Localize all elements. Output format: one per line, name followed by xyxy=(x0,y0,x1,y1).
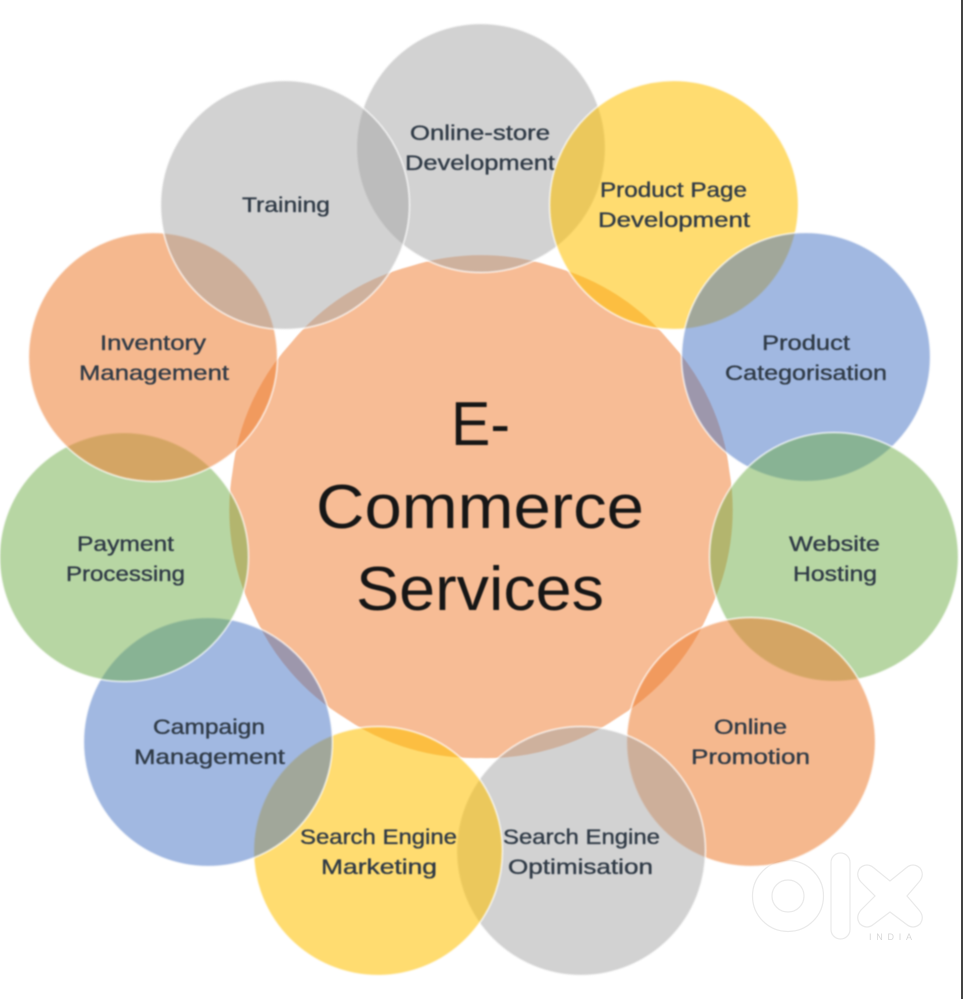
node: Training xyxy=(160,80,410,330)
watermark: OLX India logo xyxy=(752,853,922,942)
node: Payment Processing: Payment xyxy=(77,533,174,556)
node: Search Engine Optimisation xyxy=(456,726,706,976)
node: Online Promotion xyxy=(626,618,876,866)
node: Online-store Development xyxy=(356,24,606,272)
node: Search Engine Optimisation: Search Engine xyxy=(503,826,660,849)
node: Website Hosting xyxy=(710,432,958,682)
node: Product Page Development: Development xyxy=(598,209,750,232)
node: Product Page Development xyxy=(550,80,798,330)
node: Payment Processing: Processing xyxy=(66,563,185,586)
watermark: OLX India logo: INDIA xyxy=(869,932,912,942)
node: Inventory Management: Inventory xyxy=(100,332,207,355)
node: Product Categorisation: Product xyxy=(762,332,850,355)
node: Payment Processing xyxy=(0,432,248,682)
central hub: E-Commerce Services: Commerce xyxy=(316,473,644,542)
central hub: E-Commerce Services xyxy=(229,255,733,758)
node: Online-store Development: Development xyxy=(405,152,555,175)
node: Training: Training xyxy=(242,194,330,217)
node: Online Promotion: Online xyxy=(714,716,787,739)
node: Inventory Management xyxy=(28,232,278,482)
node: Campaign Management: Campaign xyxy=(153,716,265,739)
node: Search Engine Optimisation: Optimisation xyxy=(508,856,653,879)
node: Website Hosting: Website xyxy=(789,533,880,556)
central hub: E-Commerce Services: Services xyxy=(356,555,604,624)
node: Product Categorisation: Categorisation xyxy=(725,362,887,385)
node: Search Engine Marketing xyxy=(254,726,502,976)
node: Inventory Management: Management xyxy=(79,362,229,385)
node: Product Categorisation xyxy=(682,232,930,482)
node: Search Engine Marketing: Search Engine xyxy=(300,826,457,849)
node: Website Hosting: Hosting xyxy=(793,563,877,586)
node: Online-store Development: Online-store xyxy=(410,122,550,145)
node: Online Promotion: Promotion xyxy=(691,746,810,769)
node: Search Engine Marketing: Marketing xyxy=(321,856,437,879)
central hub: E-Commerce Services: E- xyxy=(451,390,510,459)
node: Product Page Development: Product Page xyxy=(600,179,747,202)
node: Campaign Management xyxy=(84,618,332,866)
node: Campaign Management: Management xyxy=(134,746,285,769)
